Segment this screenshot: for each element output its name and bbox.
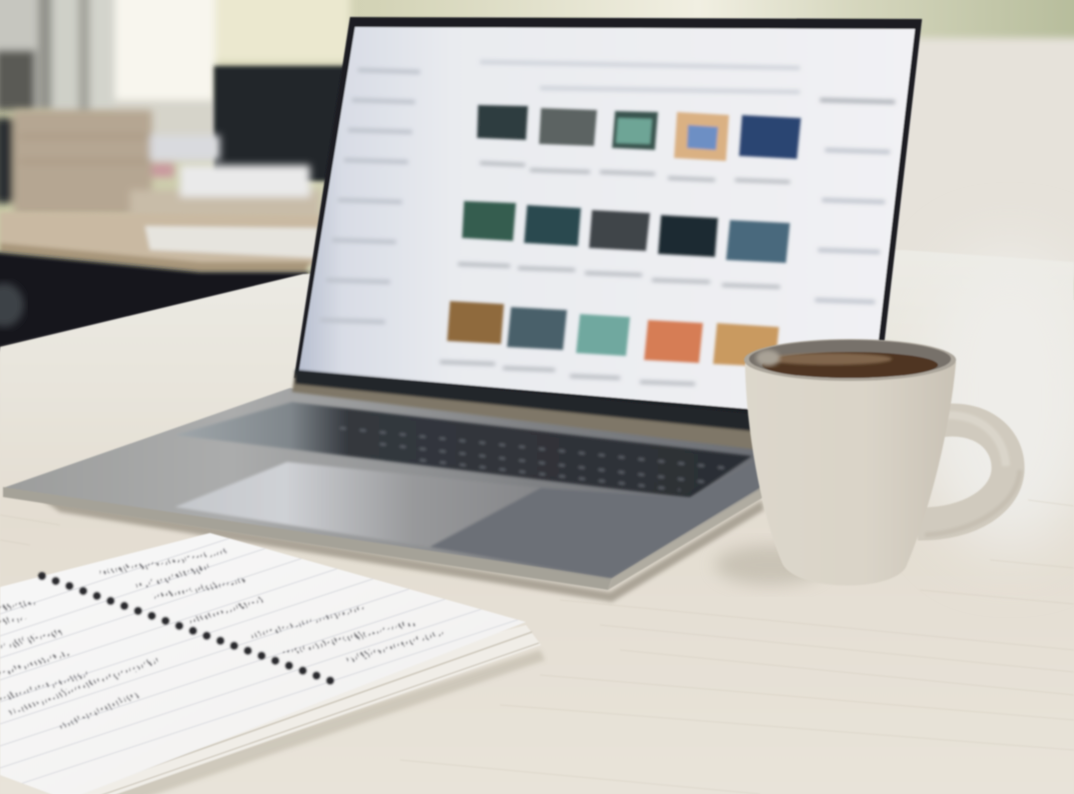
- table wood grain: [0, 500, 1074, 794]
- thumbnail row 1: [477, 105, 801, 161]
- laptop table shadow: [40, 498, 764, 602]
- right palm rest: [430, 462, 760, 578]
- dark gap under back desk: [0, 252, 310, 350]
- table top: [0, 250, 1074, 794]
- screen bezel: [294, 17, 922, 428]
- back desk: [0, 212, 320, 272]
- curtain stripes: [0, 0, 350, 160]
- notebook: [0, 532, 544, 794]
- coffee: [762, 352, 938, 378]
- right wall: [890, 38, 1074, 278]
- laptop base: [3, 388, 762, 580]
- spiral binding: [42, 576, 334, 682]
- thumbnail row 3: [447, 301, 779, 367]
- table highlight: [920, 250, 1074, 550]
- dark chair: [214, 66, 349, 181]
- blurred background room: [0, 0, 1074, 350]
- cup handle: [918, 415, 1020, 535]
- stack of books: [0, 110, 320, 220]
- coffee cup: [744, 339, 1020, 586]
- thumbnail captions: [440, 163, 790, 384]
- notebook shadow: [80, 650, 545, 794]
- notebook lower pages: [20, 625, 541, 794]
- handwriting scribbles: [0, 552, 445, 727]
- trackpad: [175, 462, 541, 547]
- base edge band: [3, 487, 612, 590]
- cup body: [745, 362, 956, 586]
- thumbnail row 2: [462, 201, 790, 263]
- cup rim: [744, 339, 956, 381]
- ruled lines: [0, 538, 518, 784]
- screen hinge: [292, 370, 760, 450]
- laptop: [3, 17, 922, 590]
- notebook top page: [0, 533, 526, 794]
- screen: [299, 27, 915, 418]
- screen sidebar: [320, 62, 895, 322]
- keyboard: [175, 402, 752, 498]
- cup shadow: [715, 545, 825, 585]
